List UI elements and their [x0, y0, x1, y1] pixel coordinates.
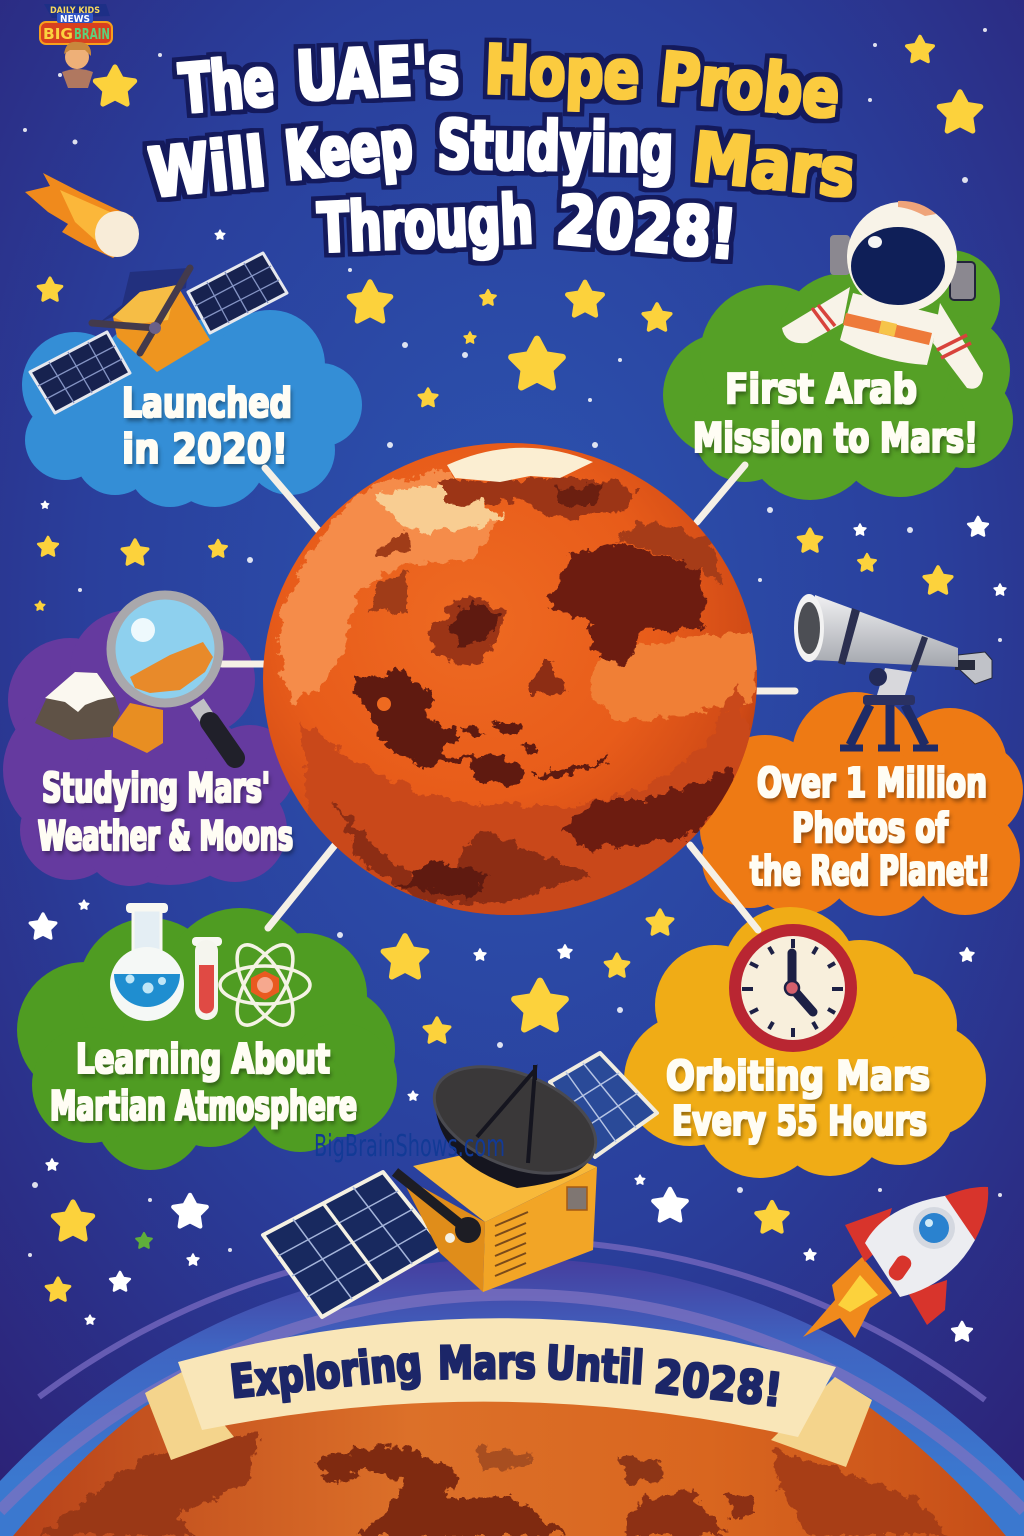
title: Studying — [437, 106, 674, 189]
logo — [40, 4, 112, 88]
text: banner — [228, 1335, 785, 1417]
icon: lab equipment — [110, 903, 310, 1033]
text: launched — [122, 379, 292, 473]
logo: NEWS — [60, 14, 90, 25]
panel: orbit cloud — [624, 907, 986, 1178]
text: photos — [750, 759, 990, 895]
text: atmosphere: Learning About — [76, 1035, 330, 1083]
icon: telescope — [794, 594, 992, 748]
text: banner: Exploring — [228, 1335, 424, 1409]
text: orbit — [666, 1052, 930, 1145]
title: Will — [146, 123, 269, 214]
panel: atmosphere cloud — [17, 908, 397, 1170]
planet Mars — [263, 443, 770, 930]
text: atmosphere — [50, 1035, 357, 1130]
connector lines — [222, 465, 795, 930]
icon: comet — [25, 173, 139, 258]
icon: small satellite — [30, 253, 287, 413]
title: Hope — [483, 31, 641, 115]
title: Through — [316, 181, 535, 269]
icon: magnifier with rocks — [35, 595, 235, 758]
title — [146, 31, 859, 276]
icon: clock — [729, 924, 857, 1052]
text: weather: Weather & Moons — [38, 812, 293, 860]
text: weather: Studying Mars' — [42, 764, 270, 812]
panel: launched cloud — [22, 310, 362, 507]
title: The — [177, 43, 277, 130]
icon: rocket — [803, 1187, 988, 1338]
text: orbit: Orbiting Mars — [666, 1052, 930, 1100]
title: UAE's — [294, 31, 461, 117]
title: Probe — [656, 38, 843, 135]
panel: first Arab cloud — [663, 250, 1013, 500]
logo: DAILY KIDS — [50, 6, 100, 16]
text: first Arab: First Arab — [725, 365, 917, 413]
bottom planet with atmosphere — [0, 1240, 1024, 1536]
icon: astronaut — [782, 201, 983, 389]
title: Mars — [689, 118, 859, 214]
text: atmosphere: Martian Atmosphere — [50, 1082, 357, 1130]
logo: BRAIN — [74, 25, 110, 43]
text: launched: Launched — [122, 379, 292, 427]
text: first Arab — [693, 365, 978, 462]
logo: BIG — [43, 25, 73, 43]
text: orbit: Every 55 Hours — [672, 1097, 927, 1145]
panel: weather cloud — [3, 610, 295, 886]
text: photos: Photos of — [792, 804, 949, 852]
text: launched: in 2020! — [122, 425, 288, 473]
icon: large satellite — [263, 1046, 657, 1317]
text: banner: Mars — [438, 1335, 536, 1390]
title: 2028! — [554, 181, 740, 276]
panel: photos cloud — [700, 692, 1023, 916]
text: banner: 2028! — [652, 1349, 785, 1417]
banner — [145, 1318, 872, 1467]
watermark: BigBrainShows.com — [314, 1129, 505, 1164]
text: banner: Until — [544, 1335, 645, 1395]
text: weather — [38, 764, 293, 860]
title: Keep — [282, 105, 416, 197]
